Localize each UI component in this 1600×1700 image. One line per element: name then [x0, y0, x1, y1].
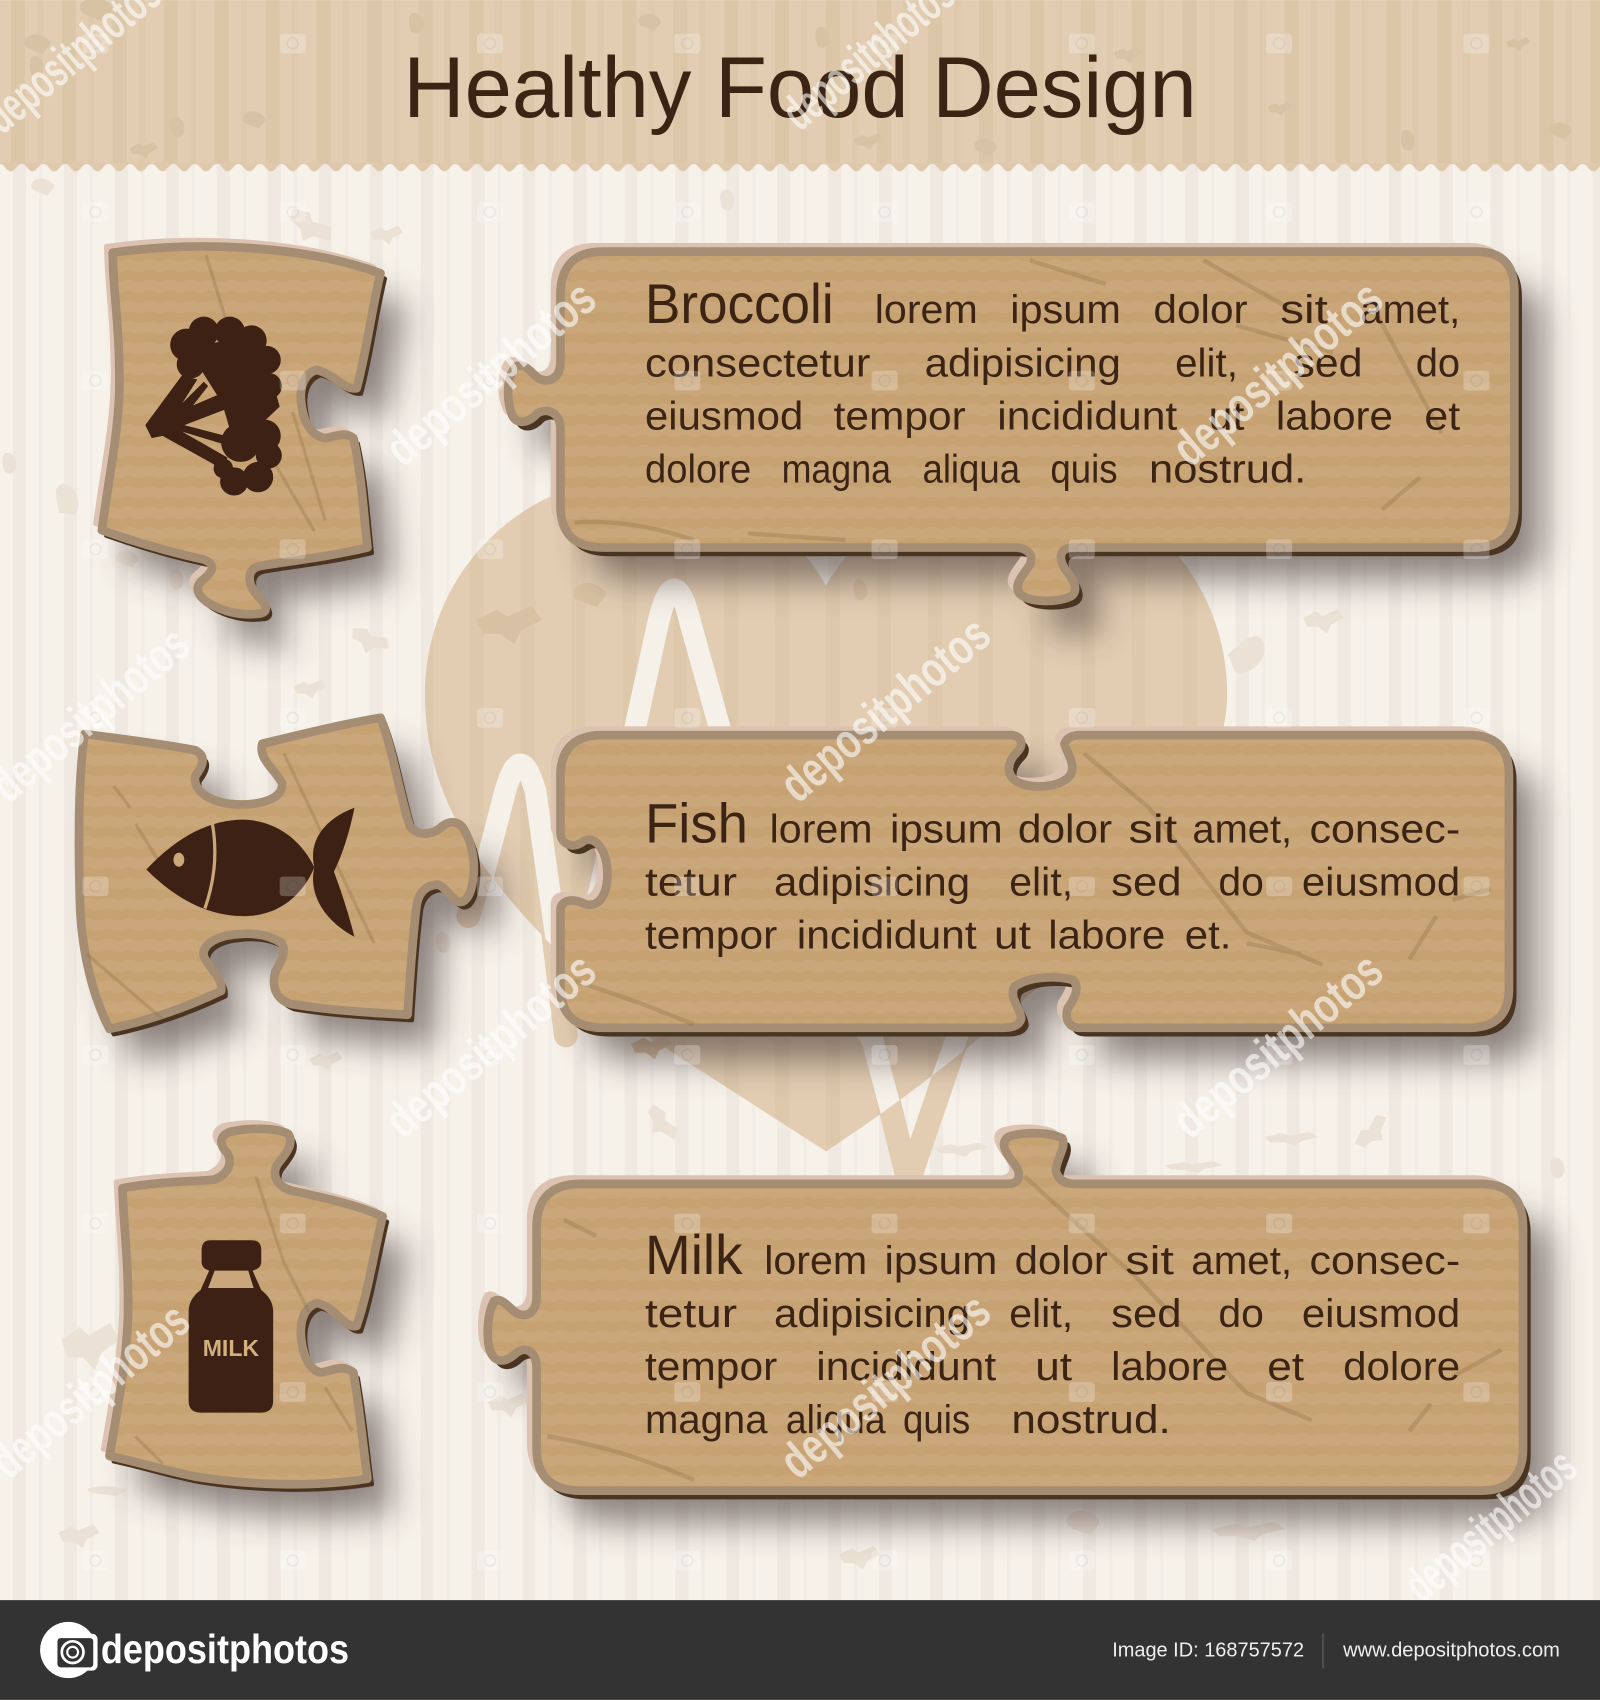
text: fish: dolor	[1018, 807, 1112, 851]
depositphotos watermarks: depositphotos	[769, 606, 1001, 813]
text: broccoli: sit	[1280, 288, 1328, 332]
logo wordmark: depositphotos	[101, 1626, 349, 1672]
text: milk: dolore	[1343, 1345, 1460, 1389]
text: broccoli: tempor	[834, 394, 966, 438]
text: broccoli: et	[1424, 394, 1460, 438]
text: fish: et.	[1185, 914, 1231, 958]
text: milk: dolor	[1015, 1239, 1108, 1283]
text: broccoli: magna	[782, 448, 892, 492]
puzzle piece: fish	[79, 718, 500, 1061]
cardboard creases	[575, 260, 1442, 540]
text: milk: et	[1267, 1345, 1304, 1389]
footer bar	[0, 1600, 1600, 1700]
cardboard creases	[206, 255, 325, 531]
text: fish: ut	[994, 914, 1031, 958]
text: broccoli	[645, 273, 1460, 492]
text: fish: labore	[1048, 914, 1165, 958]
icon: broccoli	[145, 317, 282, 496]
puzzle piece: milk	[103, 1122, 409, 1517]
text: fish: ipsum	[890, 807, 1003, 851]
text: milk: adipisicing	[774, 1292, 970, 1336]
icon: fish	[146, 808, 354, 937]
text: fish: lorem	[770, 807, 873, 851]
depositphotos watermarks: depositphotos	[1161, 270, 1393, 477]
text: broccoli: lorem	[875, 288, 978, 332]
text: milk: ipsum	[885, 1239, 997, 1283]
milk label: MILK	[203, 1335, 260, 1361]
text: broccoli: elit,	[1175, 341, 1238, 385]
cardboard creases	[87, 754, 374, 1019]
puzzle piece: broccoli	[95, 240, 407, 647]
text: milk: aliqua	[786, 1398, 886, 1442]
cardboard creases	[547, 1176, 1501, 1480]
text: fish	[645, 792, 1460, 958]
title: Healthy Food Design	[403, 39, 1197, 136]
text: broccoli: ut	[1209, 394, 1244, 438]
text: fish: tetur	[645, 861, 737, 905]
ecg line inside the heart	[478, 578, 968, 1114]
text: broccoli: nostrud.	[1149, 448, 1306, 492]
text: milk: consec-	[1309, 1239, 1460, 1283]
text: milk: ut	[1035, 1345, 1072, 1389]
text: fish: sed	[1111, 861, 1182, 905]
text: broccoli: incididunt	[997, 394, 1177, 438]
website url: www.depositphotos.com	[1342, 1639, 1560, 1662]
background stains	[2, 179, 1564, 1570]
text: broccoli: dolore	[645, 448, 751, 492]
depositphotos watermarks: depositphotos	[374, 270, 606, 477]
text: fish: consec-	[1309, 807, 1460, 851]
text: fish: Fish	[645, 792, 748, 854]
text: fish: eiusmod	[1302, 861, 1460, 905]
text: milk: eiusmod	[1302, 1292, 1460, 1336]
depositphotos watermarks: depositphotos	[374, 942, 606, 1149]
image id: Image ID: 168757572	[1112, 1639, 1304, 1662]
text: broccoli: aliqua	[922, 448, 1021, 492]
panel: fish info	[553, 729, 1537, 1060]
text: milk: elit,	[1009, 1292, 1073, 1336]
text: broccoli: sed	[1293, 341, 1363, 385]
text: milk: Milk	[645, 1224, 743, 1286]
text: broccoli: do	[1416, 341, 1460, 385]
text: fish: adipisicing	[774, 861, 970, 905]
depositphotos watermarks: depositphotos	[769, 1282, 1001, 1489]
text: milk: incididunt	[816, 1345, 996, 1389]
text: milk: sed	[1111, 1292, 1182, 1336]
text: broccoli: eiusmod	[645, 394, 803, 438]
text: fish: elit,	[1009, 861, 1073, 905]
text: fish: sit	[1128, 807, 1177, 851]
text: broccoli: adipisicing	[925, 341, 1121, 385]
text: fish: tempor	[645, 914, 777, 958]
icon: depositphotos logo	[40, 1622, 98, 1678]
text: milk: sit	[1125, 1239, 1174, 1283]
text: milk: magna	[645, 1398, 768, 1442]
text: fish: incididunt	[797, 914, 977, 958]
cardboard creases	[136, 1176, 352, 1464]
text: broccoli: consectetur	[645, 341, 870, 385]
text: broccoli: Broccoli	[645, 273, 834, 335]
text: milk: nostrud.	[1011, 1398, 1171, 1442]
text: milk: do	[1218, 1292, 1264, 1336]
text: broccoli: amet,	[1360, 288, 1460, 332]
cardboard creases	[575, 754, 1491, 1025]
text: milk: quis	[903, 1398, 970, 1442]
text: milk: tempor	[645, 1345, 777, 1389]
text: milk	[645, 1224, 1460, 1442]
text: milk: lorem	[764, 1239, 867, 1283]
ecg line outside the heart	[468, 764, 958, 1182]
panel: milk info	[480, 1127, 1551, 1523]
panel: broccoli info	[501, 245, 1543, 633]
text: milk: tetur	[645, 1292, 737, 1336]
text: fish: do	[1218, 861, 1264, 905]
text: broccoli: quis	[1050, 448, 1118, 492]
text: broccoli: labore	[1276, 394, 1393, 438]
depositphotos watermarks: depositphotos	[1161, 942, 1393, 1149]
heart emblem	[425, 477, 1227, 1176]
text: fish: amet,	[1192, 807, 1292, 851]
text: broccoli: ipsum	[1010, 288, 1121, 332]
text: milk: amet,	[1191, 1239, 1292, 1283]
text: broccoli: dolor	[1153, 288, 1248, 332]
header band	[0, 0, 1600, 172]
text: milk: labore	[1111, 1345, 1228, 1389]
icon: milk bottle	[189, 1240, 273, 1413]
